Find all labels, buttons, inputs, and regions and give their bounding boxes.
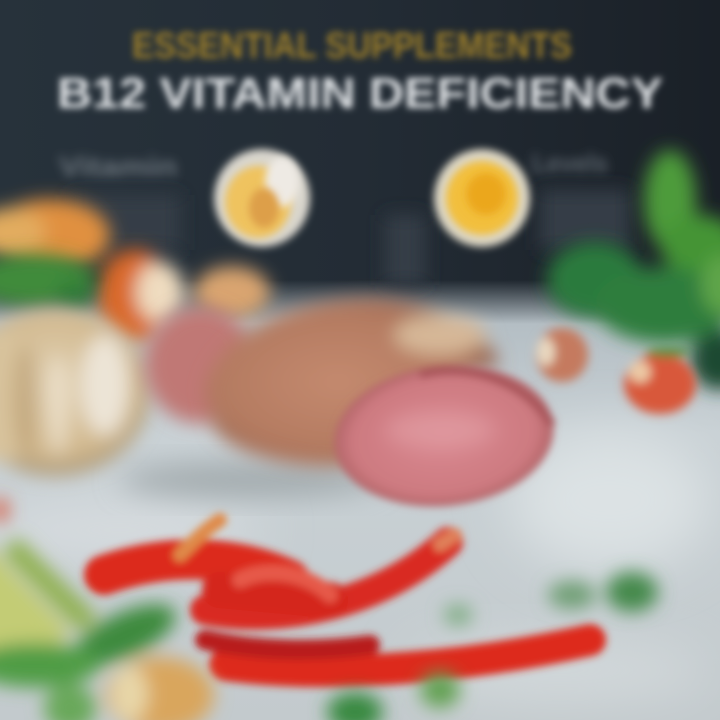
food: green garnish bottom right: [327, 572, 658, 720]
food: meat back slice: [145, 307, 255, 423]
food: large roast meat: [205, 298, 500, 466]
food: red pepper strips: [104, 520, 590, 671]
background: light marble table: [0, 280, 720, 720]
text block: left caption: Vitamin: [59, 151, 177, 182]
food: small tomato right: [624, 347, 696, 414]
food: bread loaf left: [0, 308, 150, 476]
icon: right egg circle: [434, 149, 530, 247]
food: orange vegetables top left: [0, 199, 270, 341]
heading: gold title: ESSENTIAL SUPPLEMENTS: [132, 25, 572, 66]
heading: white title: B12 VITAMIN DEFICIENCY: [57, 69, 663, 118]
icon: left egg circle: [214, 149, 310, 247]
food: celery and herbs bottom left: [0, 498, 214, 720]
food: green leaves top right: [547, 150, 720, 390]
food: small tomato centre right: [536, 328, 588, 382]
background: dark upper wall: [0, 0, 720, 340]
food: cut meat slice: [327, 355, 561, 517]
decorative dim panels: [70, 190, 630, 285]
text block: right caption: Levels: [532, 148, 608, 178]
food: green herb on bread: [0, 254, 96, 309]
